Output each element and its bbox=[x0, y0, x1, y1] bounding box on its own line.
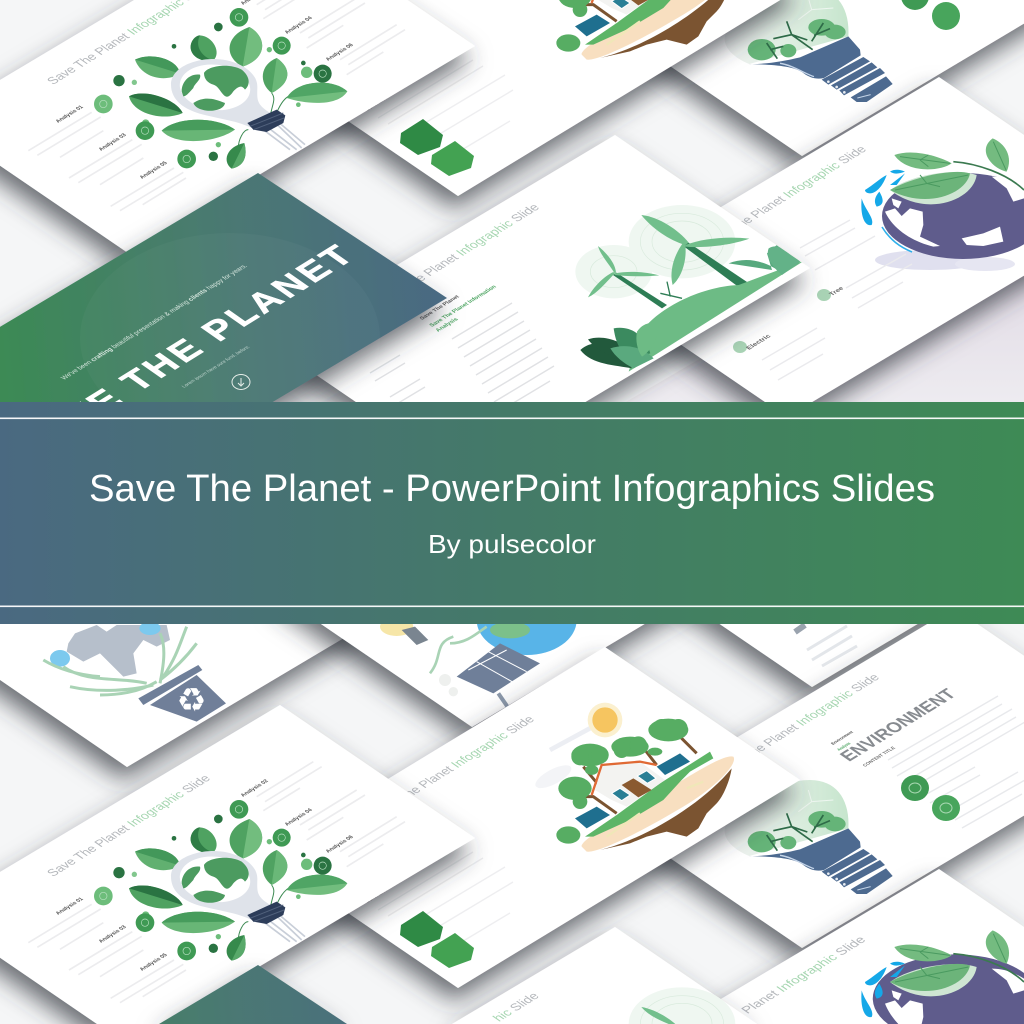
label: analysis 04: Analysis 04 bbox=[284, 16, 315, 35]
heading: bulb slide title: Save The Planet Infographic Slide bbox=[43, 772, 214, 879]
icon: lightbulb with turbines bbox=[725, 0, 893, 102]
byline: By pulsecolor bbox=[428, 529, 596, 559]
text: cover tagline: We've been crafting beautiful presentation & making clients happy for years. bbox=[60, 263, 249, 381]
decoration: back slide lines bbox=[795, 625, 857, 666]
label: analysis 01: Analysis 01 bbox=[55, 105, 86, 124]
label: analysis 05: Analysis 05 bbox=[139, 953, 170, 972]
heading: wind slide title: hic Slide bbox=[489, 990, 542, 1024]
illustration: solar panel and bulb bbox=[380, 585, 577, 713]
icon: electric bullet bbox=[733, 341, 747, 353]
panel: earth slide bbox=[658, 76, 1024, 402]
panel: third back slide bbox=[617, 347, 1024, 687]
label: environment: Environment bbox=[830, 730, 855, 746]
subheading: dark label: Save The Planet bbox=[419, 294, 461, 321]
illustration: lightbulb with turbines bbox=[725, 780, 893, 894]
text lines and shields bbox=[378, 60, 513, 176]
label: analysis 03: Analysis 03 bbox=[98, 133, 128, 152]
heading: cover title: SAVE THE PLANET bbox=[8, 238, 364, 461]
illustration: earth with leaves bbox=[861, 930, 1024, 1024]
panel: wind slide bbox=[452, 927, 757, 1024]
text: content title: CONTENT TITLE bbox=[364, 88, 403, 112]
panel: earth slide bbox=[679, 869, 1024, 1024]
icon: green circle bbox=[901, 775, 929, 801]
bottom slide collage bbox=[0, 347, 1024, 1024]
top slide collage bbox=[0, 0, 1024, 402]
panel: environment slide bbox=[607, 608, 1024, 948]
label: tree: Tree bbox=[828, 286, 846, 297]
icon: tree bullet bbox=[817, 289, 831, 301]
panel: dark cover slide bbox=[159, 965, 347, 1024]
icon: green circle bbox=[901, 0, 929, 10]
label: analysis 06: Analysis 06 bbox=[325, 43, 355, 62]
panel: recycle slide bbox=[0, 427, 475, 767]
label: analysis 02: Analysis 02 bbox=[240, 779, 270, 798]
label: analysis 01: Analysis 01 bbox=[55, 897, 86, 916]
panel: dark cover slide bbox=[0, 172, 453, 402]
illustration: globe bulb with leaves bbox=[28, 0, 405, 211]
panel: solar slide bbox=[277, 387, 819, 727]
icon: green circle two bbox=[932, 2, 960, 30]
illustration: globe bulb with leaves bbox=[28, 762, 405, 1003]
illustration: floating island house bbox=[532, 703, 734, 852]
heading: environment slide title: Save The Planet Infographic Slide bbox=[712, 671, 883, 778]
title band bbox=[0, 402, 1024, 624]
heading: environment: ENVIRONMENT bbox=[835, 685, 961, 764]
panel: environment slide bbox=[607, 0, 1024, 156]
text: cover small line: Lorem ipsum have sure fund, before. bbox=[181, 345, 252, 389]
illustration: recycling pot bbox=[43, 622, 226, 722]
text: content title: CONTENT TITLE bbox=[862, 745, 898, 768]
label: analysis 03: Analysis 03 bbox=[98, 925, 128, 944]
label: electric: Electric bbox=[745, 333, 773, 351]
text: content title: CONTENT TITLE bbox=[364, 880, 403, 904]
heading: house slide title: Save The Planet Infographic Slide bbox=[367, 713, 538, 820]
heading: earth slide title: e Planet Infographic Slide bbox=[728, 934, 869, 1022]
heading: wind slide title: Save The Planet Infographic Slide bbox=[372, 201, 543, 308]
house slide text and shields bbox=[378, 852, 513, 968]
decoration: cover circle bbox=[80, 233, 380, 443]
illustration: earth with leaves bbox=[861, 138, 1024, 271]
illustration: wind turbines bbox=[629, 987, 735, 1024]
label: analysis 05: Analysis 05 bbox=[139, 161, 170, 180]
heading: earth slide title: Save The Planet Infographic Slide bbox=[699, 143, 870, 250]
wind slide body lines bbox=[370, 303, 554, 411]
panel: house slide bbox=[263, 0, 800, 196]
subheading: green information: Save The Planet Information bbox=[429, 284, 499, 328]
illustration: wind turbines bbox=[575, 205, 805, 372]
panel: bulb slide bbox=[0, 0, 475, 253]
shade: purple glow under earth slide bbox=[626, 276, 1024, 402]
title: Save The Planet - PowerPoint Infographics Slides bbox=[89, 468, 935, 510]
illustration: recycling pot: ♻ bbox=[177, 681, 207, 720]
earth slide body lines bbox=[762, 220, 912, 380]
panel: wind slide bbox=[294, 134, 816, 402]
panel: bulb slide bbox=[0, 705, 475, 1024]
label: analysis 04: Analysis 04 bbox=[284, 808, 315, 827]
panel: house slide bbox=[263, 647, 800, 988]
environment text lines bbox=[888, 696, 1024, 828]
label: analysis green: Analysis bbox=[836, 741, 852, 752]
icon: arrow circle bbox=[232, 374, 250, 390]
icon: green circle two bbox=[932, 795, 960, 821]
subheading: green analysis: Analysis bbox=[435, 317, 461, 333]
label: analysis 06: Analysis 06 bbox=[325, 835, 355, 854]
illustration: floating island house bbox=[556, 0, 724, 60]
